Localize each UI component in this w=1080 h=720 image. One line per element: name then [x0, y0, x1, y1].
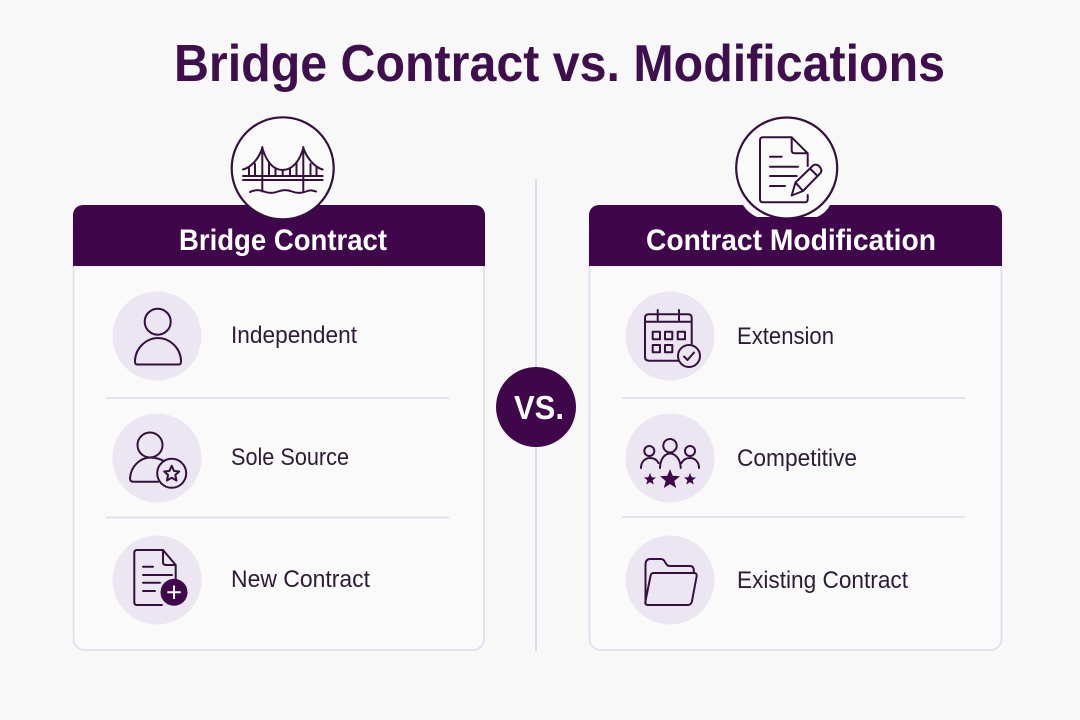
panel: contract modification: [589, 118, 1002, 650]
divider: [622, 398, 965, 517]
title: Bridge Contract vs. Modifications: [174, 35, 945, 93]
card body: [590, 215, 1002, 650]
row: competitive: Competitive: [737, 445, 857, 472]
row: independent: Independent: [231, 322, 357, 349]
vs badge: VS.: [514, 389, 564, 426]
row: sole source: [112, 414, 349, 502]
header text: Contract Modification: [646, 224, 936, 257]
row: existing contract: [626, 536, 908, 624]
icon: document with pencil: [736, 118, 837, 218]
row: new contract: [112, 536, 370, 624]
divider: [106, 398, 449, 518]
icon: bridge: [232, 117, 334, 219]
row: extension: Extension: [737, 323, 834, 350]
row: sole source: Sole Source: [231, 444, 349, 471]
row: extension: [626, 292, 834, 380]
header bar: [73, 205, 485, 266]
center divider line: [535, 179, 537, 651]
card body: [74, 215, 484, 650]
row: competitive: [626, 414, 857, 502]
vs badge: [496, 367, 576, 447]
row: existing contract: Existing Contract: [737, 567, 908, 594]
panel: bridge contract: [73, 117, 485, 650]
row: independent: [112, 292, 357, 380]
header text: Bridge Contract: [179, 224, 387, 257]
header bar: [589, 205, 1002, 266]
row: new contract: New Contract: [231, 566, 370, 593]
